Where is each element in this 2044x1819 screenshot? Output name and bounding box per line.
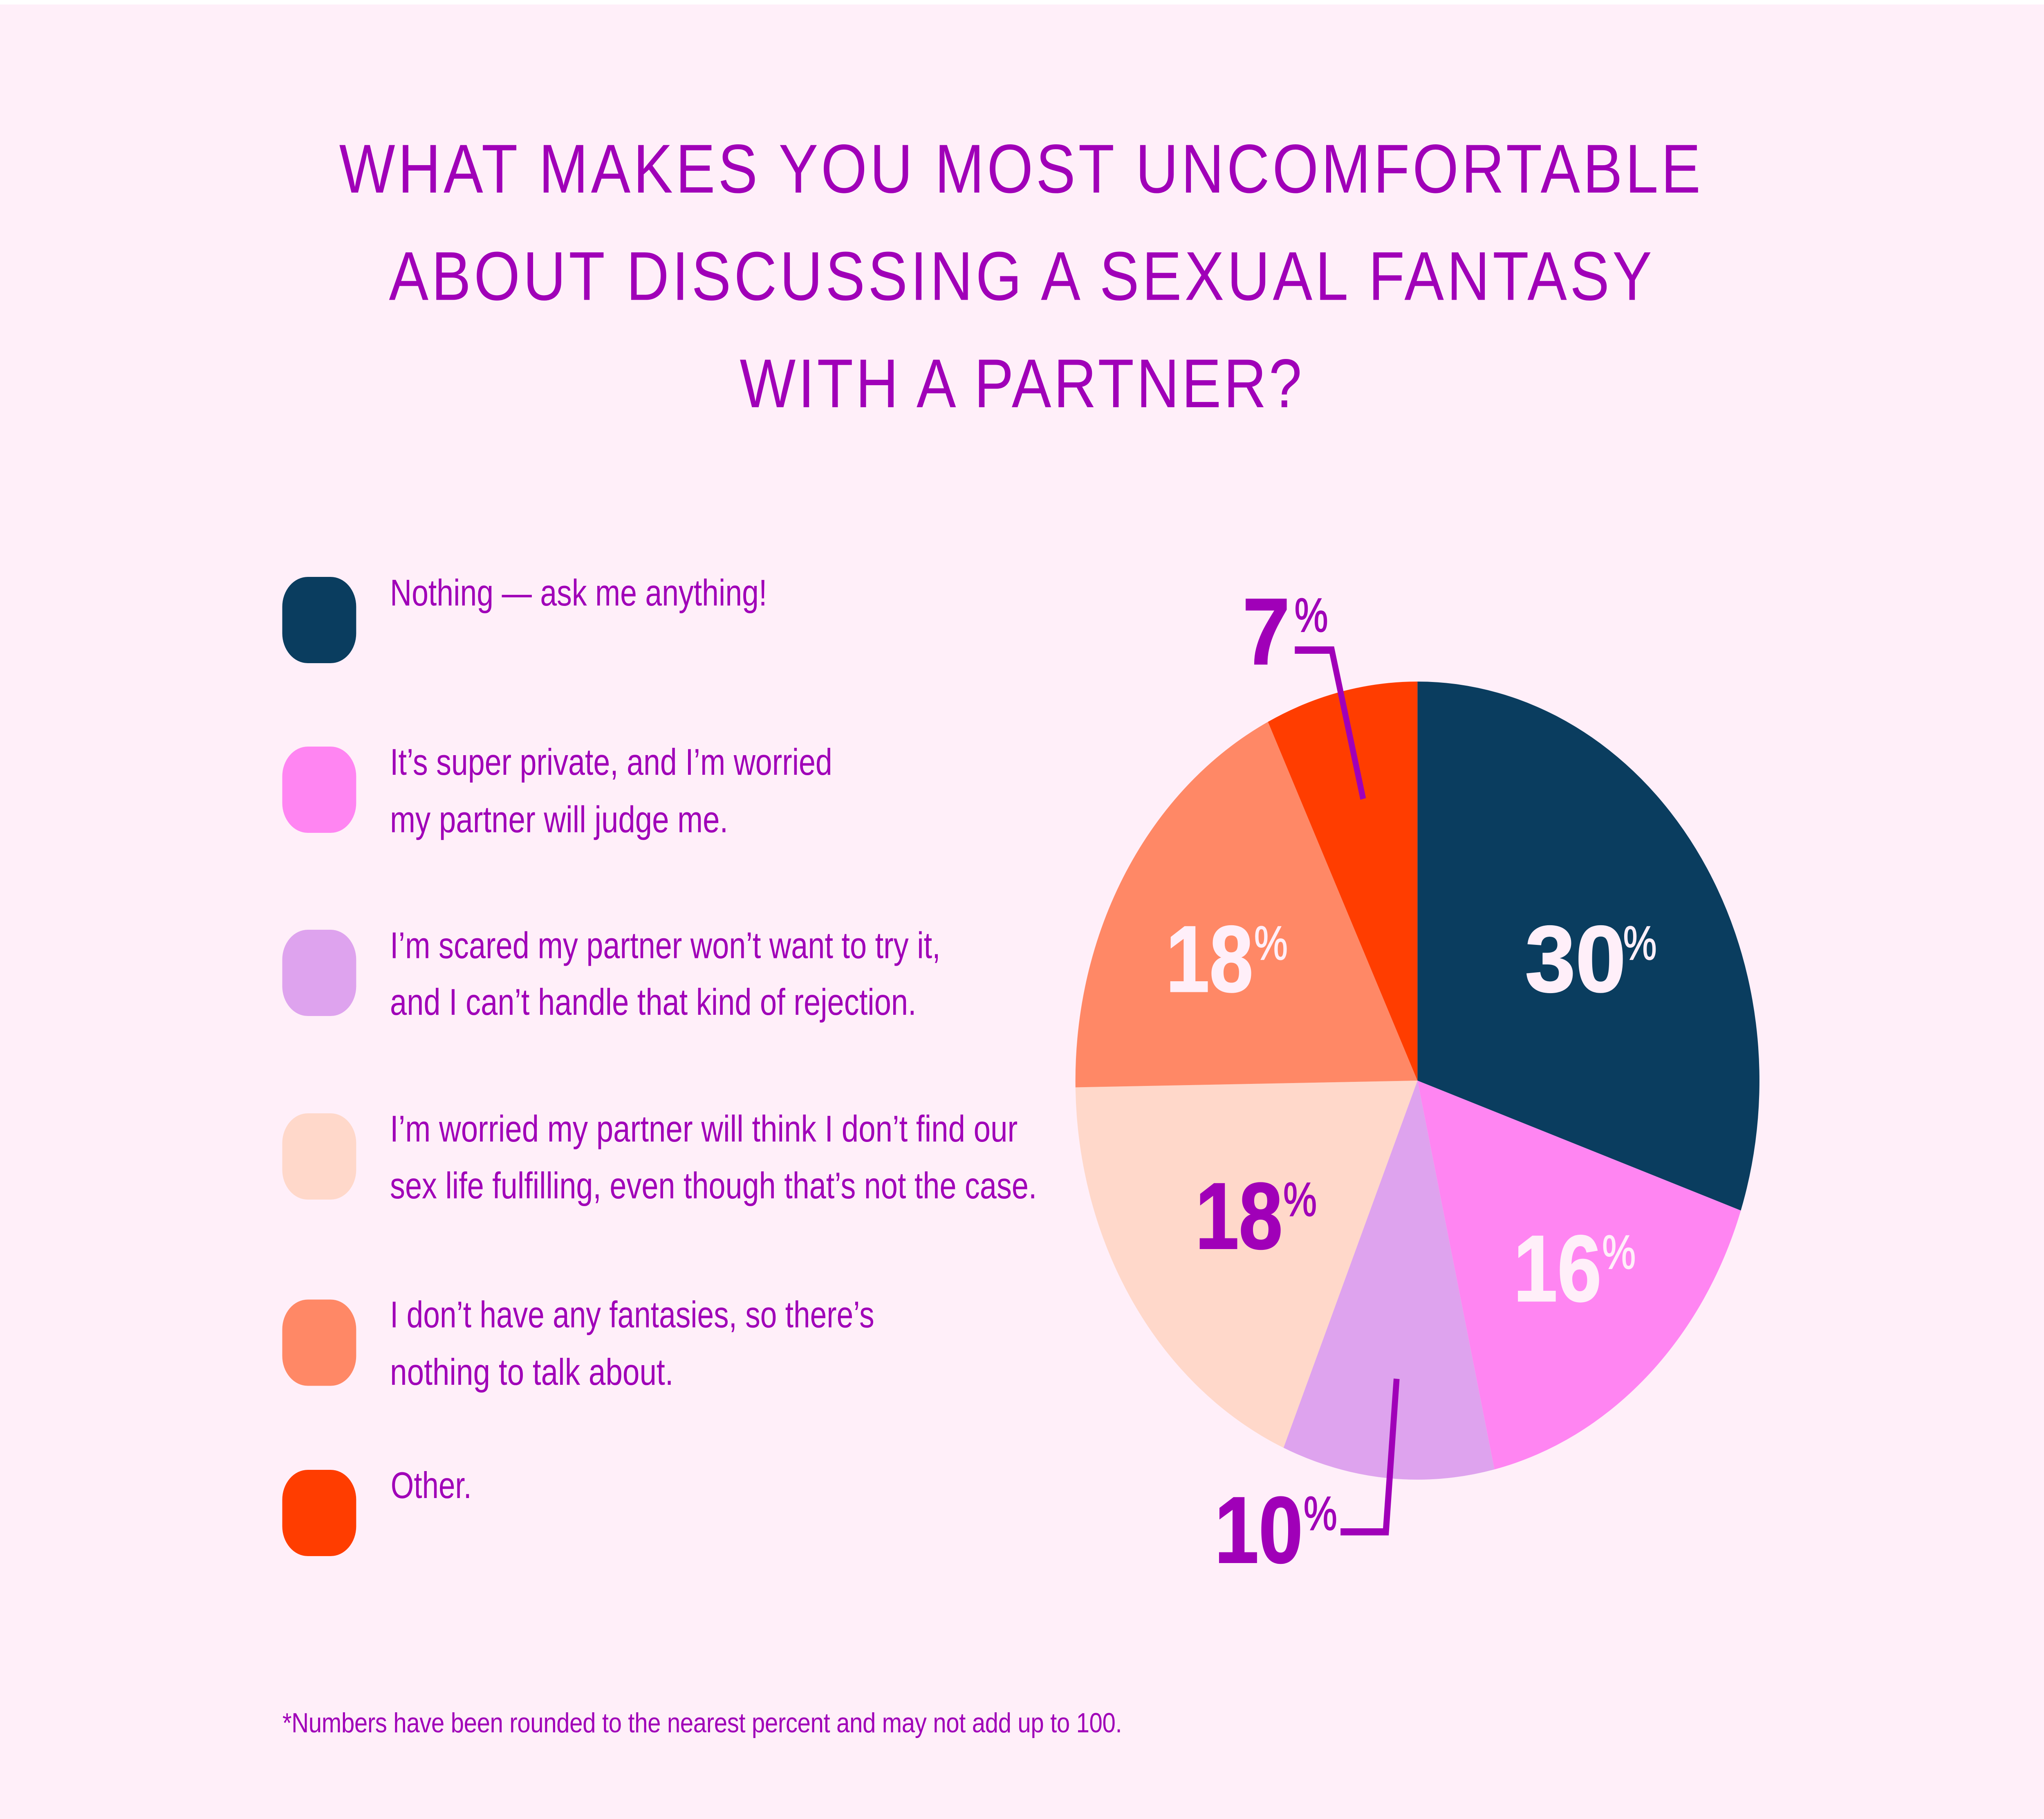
slice: other 7% xyxy=(1268,682,1417,1081)
label: 10% with leader line xyxy=(1215,1379,1400,1583)
legend xyxy=(282,572,1037,1556)
legend item: super private: my partner will judge me. xyxy=(390,798,728,840)
legend item: no fantasies: I don’t have any fantasies, so there’s xyxy=(390,1294,874,1335)
pie chart xyxy=(1076,682,1759,1480)
label: 18% sex life fulfilling: % xyxy=(1283,1173,1317,1227)
slice: super private 16% xyxy=(1417,1081,1741,1469)
top white band xyxy=(0,0,2044,4)
slice: sex life fulfilling 18% xyxy=(1076,1081,1417,1448)
legend item: super private xyxy=(282,741,832,840)
slice: no fantasies 18% xyxy=(1076,722,1417,1088)
slice: nothing 30% xyxy=(1417,682,1759,1211)
title: WHAT MAKES YOU MOST UNCOMFORTABLE xyxy=(339,131,1701,208)
label: 10% with leader line: 10 xyxy=(1215,1478,1303,1583)
slice: scared of rejection 10% xyxy=(1284,1081,1495,1480)
label: 18% no fantasies: 18 xyxy=(1166,907,1253,1012)
legend item: scared of rejection xyxy=(282,924,941,1023)
label: 18% sex life fulfilling: 18 xyxy=(1195,1164,1282,1269)
label: 16%: 16 xyxy=(1513,1216,1601,1321)
legend item: sex life fulfilling: I’m worried my partner will think I don’t find our xyxy=(390,1108,1018,1149)
legend item: nothing: Nothing — ask me anything! xyxy=(390,572,767,613)
legend item: scared of rejection: and I can’t handle that kind of rejection. xyxy=(390,981,917,1023)
legend item: no fantasies: nothing to talk about. xyxy=(390,1351,674,1393)
label: 7% with leader line xyxy=(1243,579,1366,800)
title xyxy=(339,131,1701,422)
legend item: sex life fulfilling xyxy=(282,1108,1037,1206)
label: 30% xyxy=(1525,907,1657,1012)
label: 7% with leader line: 7 xyxy=(1243,579,1290,684)
footnote: *Numbers have been rounded to the nearest percent and may not add up to 100. xyxy=(282,1708,1122,1738)
legend item: nothing xyxy=(282,572,767,663)
legend item: no fantasies xyxy=(282,1294,874,1393)
legend item: super private: It’s super private, and I’m worried xyxy=(390,741,832,783)
legend item: scared of rejection: I’m scared my partner won’t want to try it, xyxy=(390,924,941,966)
label: 10% with leader line: % xyxy=(1304,1487,1337,1541)
label: 7% with leader line: % xyxy=(1294,589,1328,642)
legend item: other: Other. xyxy=(391,1464,472,1506)
label: 30%: 30 xyxy=(1525,907,1626,1012)
title: WITH A PARTNER? xyxy=(740,345,1302,422)
label: 18% no fantasies: % xyxy=(1254,917,1288,970)
title: ABOUT DISCUSSING A SEXUAL FANTASY xyxy=(389,238,1652,315)
label: 16%: % xyxy=(1602,1226,1636,1279)
label: 30%: % xyxy=(1623,917,1657,970)
legend item: sex life fulfilling: sex life fulfilling, even though that’s not the case. xyxy=(390,1164,1037,1206)
legend item: other xyxy=(282,1464,472,1556)
